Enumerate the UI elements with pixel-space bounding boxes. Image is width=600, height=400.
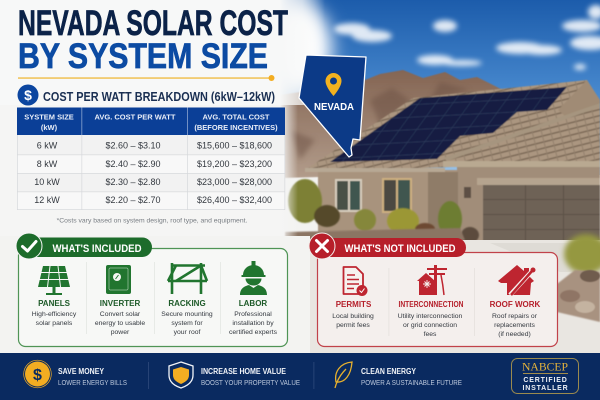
item: racking bbox=[161, 263, 213, 336]
item: roof work: ROOF WORK bbox=[490, 300, 541, 309]
icon: house with wrench bbox=[498, 265, 536, 295]
badge: NABCEP certified installer bbox=[512, 358, 578, 394]
item: labor: certified experts bbox=[229, 329, 278, 336]
heading pill: WHAT'S INCLUDED bbox=[52, 243, 142, 255]
table header bbox=[17, 108, 285, 135]
title rule bbox=[18, 75, 274, 81]
benefit: home value bbox=[169, 362, 300, 388]
benefit: save money bbox=[24, 360, 127, 388]
icon: inverter box bbox=[106, 265, 131, 294]
benefit: clean energy: CLEAN ENERGY bbox=[361, 367, 417, 376]
left white fade bbox=[0, 0, 325, 105]
item: racking: Secure mounting bbox=[161, 311, 213, 318]
garage bbox=[477, 178, 600, 185]
table rows: $19,200 – $23,200 bbox=[197, 159, 272, 169]
item: inverter: energy to usable bbox=[95, 320, 145, 327]
item: interconnection bbox=[398, 265, 464, 338]
icon: dollar bbox=[18, 84, 38, 106]
item: interconnection: fees bbox=[424, 331, 437, 338]
item: roof work: (if needed) bbox=[498, 331, 531, 338]
item: labor bbox=[229, 261, 278, 336]
table rows: 8 kW bbox=[37, 159, 58, 169]
icon: utility pole and meter bbox=[417, 265, 447, 295]
table header: AVG. COST PER WATT bbox=[95, 112, 176, 122]
panel: what's not included bbox=[309, 233, 558, 346]
table rows: 10 kW bbox=[34, 177, 60, 187]
item: permits bbox=[332, 267, 374, 329]
item: inverter: power bbox=[111, 329, 130, 336]
table header: AVG. TOTAL COST bbox=[203, 112, 270, 122]
badge: NABCEP certified installer: CERTIFIED bbox=[523, 377, 568, 384]
item: panels bbox=[32, 266, 77, 327]
right shrub bbox=[564, 234, 600, 274]
benefit: clean energy: POWER A SUSTAINABLE FUTURE bbox=[361, 378, 462, 387]
item: labor: LABOR bbox=[239, 299, 267, 308]
icon: x mark bbox=[309, 233, 335, 259]
solar array bbox=[330, 87, 567, 162]
item: roof work: replacements bbox=[494, 322, 535, 329]
table rows: $23,000 – $28,000 bbox=[197, 177, 272, 187]
icon: check bbox=[16, 233, 42, 259]
item: interconnection: or grid connection bbox=[403, 322, 457, 329]
item: panels: PANELS bbox=[38, 299, 71, 308]
fascia bbox=[305, 168, 445, 172]
driveway bbox=[285, 240, 600, 400]
title: NEVADA SOLAR COST bbox=[18, 4, 288, 43]
item: roof work bbox=[490, 265, 541, 338]
section heading: cost per watt: COST PER WATT BREAKDOWN (6kW–12kW) bbox=[43, 89, 275, 104]
table rows bbox=[34, 140, 272, 205]
windows bbox=[335, 179, 362, 212]
icon: solar panel bbox=[38, 266, 70, 295]
badge: NABCEP certified installer: NABCEP bbox=[522, 360, 568, 374]
table rows: $15,600 – $18,600 bbox=[197, 140, 272, 150]
item: permits: Local building bbox=[332, 313, 374, 320]
item: inverter: Convert solar bbox=[100, 311, 141, 318]
heading pill bbox=[16, 233, 152, 259]
heading pill bbox=[309, 233, 466, 259]
item: roof work: Roof repairs or bbox=[492, 313, 538, 320]
house walls bbox=[318, 170, 458, 232]
item: panels: High-efficiency bbox=[32, 311, 77, 318]
table rows: 12 kW bbox=[34, 195, 60, 205]
item: interconnection: INTERCONNECTION bbox=[398, 300, 464, 309]
item: permits: permit fees bbox=[336, 322, 370, 329]
item: racking: RACKING bbox=[168, 299, 206, 308]
icon: worker bbox=[240, 261, 267, 295]
main roof bbox=[305, 80, 600, 172]
Nevada state badge bbox=[299, 55, 366, 157]
table rows: $2.60 – $3.10 bbox=[105, 140, 161, 150]
icon: map pin bbox=[326, 73, 342, 96]
item: racking: your roof bbox=[174, 329, 201, 336]
icon: document with check bbox=[344, 267, 368, 296]
icon: coin: $ bbox=[33, 367, 42, 384]
item: panels: solar panels bbox=[36, 320, 73, 327]
table rows: $2.20 – $2.70 bbox=[105, 195, 161, 205]
shrubs bbox=[288, 179, 479, 243]
section heading: cost per watt bbox=[18, 84, 275, 106]
item: inverter: INVERTER bbox=[100, 299, 140, 308]
mountains bbox=[280, 70, 520, 178]
table rows: 6 kW bbox=[37, 140, 58, 150]
item: permits: PERMITS bbox=[336, 300, 372, 309]
item: labor: installation by bbox=[232, 320, 274, 327]
rocks bbox=[557, 270, 600, 322]
benefit: home value: INCREASE HOME VALUE bbox=[201, 367, 287, 376]
benefit: clean energy bbox=[335, 362, 462, 388]
panel: what's included bbox=[16, 233, 288, 346]
item: interconnection: Utility interconnection bbox=[398, 313, 463, 320]
table header: (kW) bbox=[41, 123, 58, 132]
item: racking: system for bbox=[171, 320, 203, 327]
table header: SYSTEM SIZE bbox=[24, 112, 74, 122]
table rows: $26,400 – $32,400 bbox=[197, 195, 272, 205]
table header: (BEFORE INCENTIVES) bbox=[194, 123, 278, 132]
front gable roof bbox=[443, 103, 600, 163]
pricing table bbox=[17, 108, 285, 210]
benefit: save money: SAVE MONEY bbox=[58, 367, 105, 376]
icon: dollar: $ bbox=[24, 87, 32, 103]
title: BY SYSTEM SIZE bbox=[18, 37, 268, 76]
benefit: save money: LOWER ENERGY BILLS bbox=[58, 378, 127, 387]
badge: NABCEP certified installer: INSTALLER bbox=[523, 385, 568, 392]
item: inverter bbox=[95, 265, 145, 336]
icon: racking frame bbox=[168, 263, 207, 294]
title bbox=[18, 4, 288, 76]
benefit: home value: BOOST YOUR PROPERTY VALUE bbox=[201, 378, 300, 387]
footer band bbox=[0, 353, 600, 400]
table rows: $2.30 – $2.80 bbox=[105, 177, 161, 187]
lamp bbox=[464, 187, 471, 198]
icon: leaf bbox=[335, 362, 352, 388]
icon: shield bbox=[169, 362, 193, 388]
Nevada state badge: NEVADA bbox=[314, 102, 354, 113]
table rows: $2.40 – $2.90 bbox=[105, 159, 161, 169]
heading pill: WHAT'S NOT INCLUDED bbox=[344, 243, 456, 255]
item: labor: Professional bbox=[234, 311, 272, 318]
footnote: *Costs vary based on system design, roof type, and equipment. bbox=[57, 218, 248, 224]
